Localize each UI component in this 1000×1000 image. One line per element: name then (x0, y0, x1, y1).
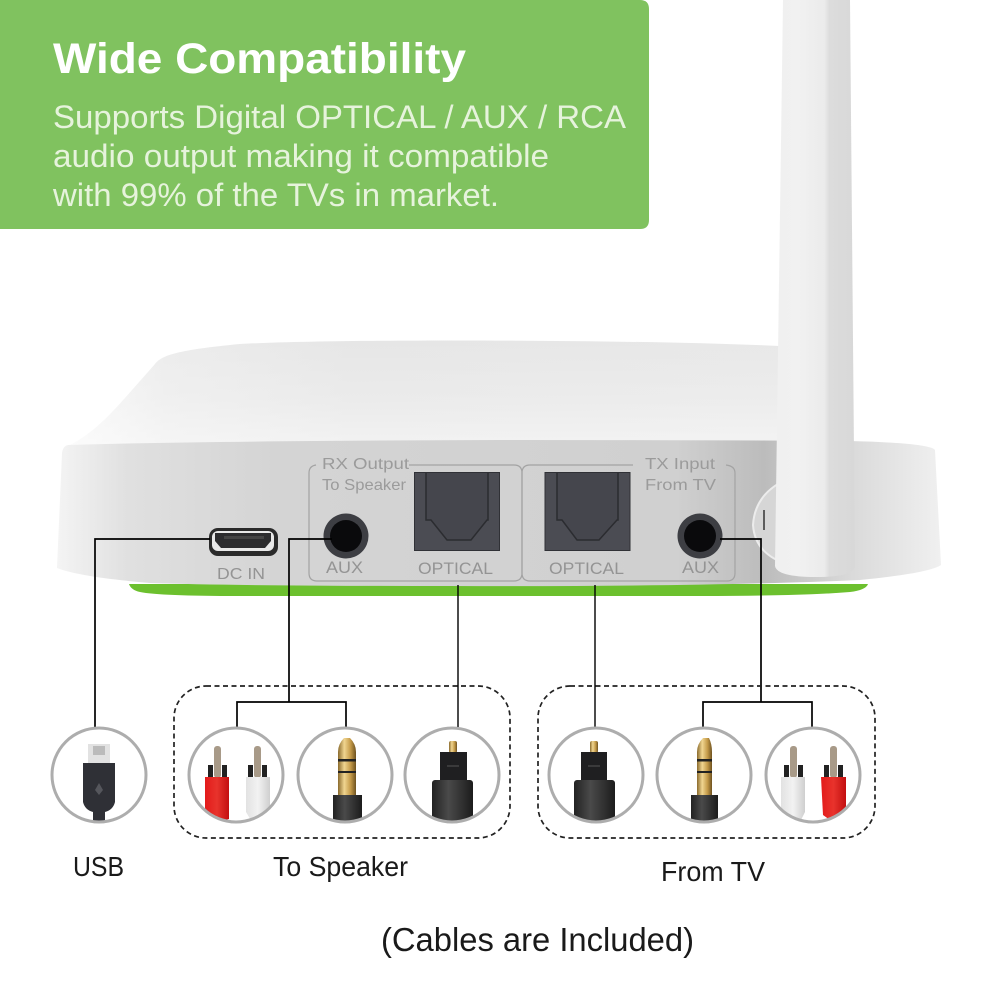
connector line: USB (95, 539, 210, 727)
dashed group: from TV (538, 686, 875, 838)
description text: Supports Digital OPTICAL / AUX / RCA (53, 99, 627, 135)
cable circle: 3.5mm jack from TV (657, 728, 751, 825)
port labels: OPTICAL (418, 559, 493, 578)
cable circle: optical to speaker (405, 728, 499, 825)
device front face (57, 440, 941, 586)
description text: with 99% of the TVs in market. (52, 177, 499, 213)
port labels: DC IN (217, 566, 265, 583)
device top surface (66, 340, 780, 447)
cable circle: USB (52, 728, 146, 825)
green base strip (129, 584, 868, 596)
label: From TV: From TV (661, 856, 765, 887)
micro USB port (209, 528, 278, 556)
device: transmitter receiver box (57, 0, 941, 727)
port labels: AUX (682, 558, 719, 577)
cable circle: RCA from TV (766, 728, 860, 822)
port labels: OPTICAL (549, 559, 624, 578)
connector line: to speaker AUX (237, 539, 346, 727)
antenna (775, 0, 855, 577)
connector line: from TV AUX (703, 539, 812, 727)
header panel (0, 0, 649, 229)
cable circle: optical from TV (549, 728, 643, 825)
label: To Speaker: To Speaker (273, 851, 408, 882)
port labels: AUX (326, 558, 363, 577)
RX label: To Speaker (322, 477, 407, 494)
TX label: From TV (645, 477, 716, 494)
RX label (322, 456, 410, 494)
RX label: RX Output (322, 456, 410, 473)
cable circle: 3.5mm jack to speaker (298, 728, 392, 825)
connector line: optical out (457, 585, 459, 727)
description text (52, 99, 627, 213)
TX label: TX Input (645, 456, 716, 473)
connector line: optical in (594, 585, 596, 727)
note: cables included: (Cables are Included) (381, 921, 694, 958)
AUX jack left (324, 514, 368, 558)
port labels (217, 558, 719, 583)
description text: audio output making it compatible (53, 138, 549, 174)
optical port right (545, 472, 630, 550)
cable circle: RCA to speaker (189, 728, 283, 822)
label: USB: USB (73, 851, 124, 882)
port panel outlines (309, 465, 735, 581)
heading: Wide Compatibility (53, 35, 466, 83)
optical port left (414, 472, 500, 550)
dashed group: to speaker (174, 686, 510, 838)
TX label (645, 456, 716, 494)
antenna base ring (753, 478, 790, 565)
AUX jack right (678, 514, 722, 558)
